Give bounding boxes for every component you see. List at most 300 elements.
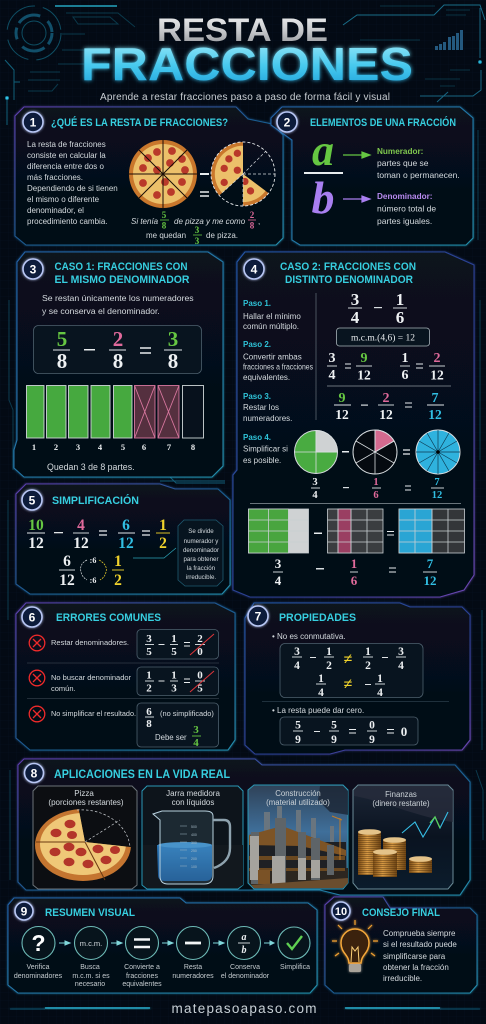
- step icons: [22, 926, 310, 960]
- reduction by 6: 6: [63, 553, 71, 570]
- mcm box: m.c.m.(4,6) = 12: [351, 332, 415, 344]
- equation box: 8: [113, 349, 123, 373]
- error 1: 0: [197, 646, 203, 658]
- panel 7: propiedades: [245, 603, 470, 754]
- property 1: 1: [365, 646, 371, 658]
- error 3: Debe ser: [155, 733, 187, 742]
- subtraction of numerators: 9: [338, 391, 346, 406]
- equation box: 5: [57, 327, 67, 351]
- card finance: (dinero restante): [372, 799, 430, 808]
- equivalent fractions: [327, 351, 451, 386]
- panel 4: caso 2: [233, 252, 474, 597]
- property 2: • La resta puede dar cero.: [272, 706, 364, 715]
- whole pizza cut into eight: [128, 139, 198, 209]
- badge 2: [277, 112, 297, 132]
- error 3: 8: [146, 718, 152, 730]
- definition text: denominador, el: [27, 206, 84, 215]
- card pizza: [33, 786, 137, 889]
- tip text: simplificarse para: [383, 952, 446, 961]
- badge 9: [15, 902, 33, 920]
- example sentence: 8: [162, 220, 167, 230]
- steps text: Paso 3.: [243, 392, 271, 401]
- side circuit lines: [8, 130, 483, 880]
- bar numbers: 4: [98, 442, 103, 452]
- circle fractions: 1: [373, 477, 379, 488]
- heading 10: CONSEJO FINAL: [362, 907, 440, 919]
- reduction by 6: :6: [90, 556, 96, 565]
- panel 5: simplificacion: [16, 484, 230, 594]
- badge 6: 6: [29, 610, 36, 624]
- problem 3/4 - 1/6: [348, 290, 407, 327]
- grid fractions: 7: [427, 556, 434, 571]
- badge 10: 10: [335, 906, 347, 918]
- error 3: No simplificar el resultado.: [51, 709, 136, 718]
- simplification equation: 6: [122, 517, 130, 534]
- simplification equation: 12: [118, 535, 134, 552]
- steps text: Paso 2.: [243, 340, 271, 349]
- heading 9: RESUMEN VISUAL: [45, 907, 135, 919]
- steps text: común múltiplo.: [243, 322, 299, 331]
- example sentence: me quedan: [146, 231, 186, 240]
- note box: para obtener: [183, 556, 219, 563]
- equation box: 2: [113, 327, 123, 351]
- definition text: procedimiento cambia.: [27, 217, 107, 226]
- step arrows: [59, 941, 274, 945]
- error 2: [29, 667, 219, 696]
- step icons: b: [242, 945, 246, 956]
- reduction by 6: 12: [59, 572, 75, 589]
- bar numbers: 3: [76, 442, 80, 452]
- simplification equation: 4: [77, 517, 85, 534]
- property 2: 5: [331, 720, 337, 732]
- card construction: [248, 785, 349, 890]
- steps text: Paso 1.: [243, 299, 271, 308]
- error 2: 1: [171, 670, 177, 682]
- property 1: ≠: [344, 676, 353, 693]
- card pizza: Pizza: [74, 789, 94, 798]
- note box: la fracción: [187, 565, 216, 572]
- note box: numerador y: [184, 538, 219, 545]
- circle 3/4: [294, 430, 338, 474]
- numerador text: Numerador:: [377, 147, 423, 156]
- mcm box: [336, 328, 430, 346]
- denominador text: [377, 192, 436, 226]
- title: RESTA DE: RESTA DE: [157, 12, 328, 48]
- heading 8: APLICACIONES EN LA VIDA REAL: [54, 767, 230, 781]
- heading 3: [54, 261, 190, 286]
- step labels: equivalentes: [122, 981, 162, 988]
- example sentence: 8: [250, 220, 255, 230]
- equivalent fractions: 4: [328, 368, 336, 383]
- subtraction of numerators: 12: [379, 407, 393, 422]
- subtraction of numerators: [334, 391, 444, 422]
- example sentence: 3: [195, 236, 200, 246]
- panel 1 frame: [15, 107, 283, 245]
- equals: [403, 450, 410, 454]
- grid fractions: [273, 556, 437, 588]
- step labels: Simplifica: [280, 964, 310, 971]
- definition text: [27, 140, 118, 226]
- equation box: 8: [57, 349, 67, 373]
- grid fractions: 12: [424, 573, 436, 588]
- heading 3: CASO 1: FRACCIONES CON: [54, 261, 188, 273]
- denominador text: número total de: [377, 204, 436, 214]
- card measuring jug: 500: [191, 825, 197, 829]
- tip text: obtener la fracción: [383, 963, 449, 972]
- card measuring jug: 200: [191, 857, 197, 861]
- error 1: 5: [171, 646, 177, 658]
- equivalent fractions: 12: [430, 368, 444, 382]
- badge 2: 2: [284, 116, 291, 130]
- definition text: consiste en calcular la: [27, 151, 106, 160]
- step labels: Convierte a: [124, 964, 160, 971]
- denominador text: Denominador:: [377, 192, 432, 201]
- circle fractions: 6: [373, 490, 379, 501]
- note box: denominador: [183, 547, 219, 554]
- step icons: ?: [31, 930, 46, 956]
- rule text: [42, 293, 194, 316]
- heading 5: SIMPLIFICACIÓN: [52, 494, 139, 507]
- error 2: 3: [171, 682, 177, 694]
- equals: [387, 532, 394, 535]
- property 1: • No es conmutativa.: [272, 632, 346, 641]
- subtraction of numerators: 12: [335, 407, 349, 422]
- property 1: ≠: [344, 651, 353, 668]
- minus: [314, 532, 322, 534]
- simplification equation: 2: [159, 535, 167, 552]
- arrow to denominator: [343, 196, 370, 202]
- step labels: fracciones: [126, 973, 158, 980]
- equivalent fractions: 2: [434, 351, 440, 366]
- fraction bars: [26, 386, 204, 438]
- step labels: Conserva: [230, 964, 260, 971]
- steps text: fracciones a fracciones: [243, 362, 313, 372]
- steps text: Simplificar si: [243, 444, 288, 454]
- minus sign: [200, 173, 209, 175]
- equation box: 8: [168, 349, 178, 373]
- step labels: el denominador: [221, 973, 270, 980]
- badge 8: [24, 764, 44, 782]
- fraction bar: [304, 172, 343, 174]
- error 2: 1: [146, 670, 152, 682]
- circle fractions: 3: [312, 477, 318, 488]
- definition text: el mismo o diferente: [27, 195, 100, 204]
- panel 3: caso 1: [14, 252, 223, 477]
- arrow to numerator: [343, 152, 370, 158]
- property 2: [272, 706, 418, 746]
- panel 2 frame: [271, 107, 473, 245]
- tip text: [383, 929, 457, 983]
- reduction by 6: 2: [114, 572, 122, 589]
- bar numbers: 1: [32, 442, 36, 452]
- property 1: 2: [365, 660, 371, 672]
- subtraction of numerators: 7: [432, 391, 438, 406]
- badge 7: [248, 606, 268, 626]
- numerador text: toman o permanecen.: [377, 170, 460, 180]
- error 1: 2: [197, 633, 203, 645]
- step labels: Resta: [184, 964, 202, 971]
- footer decoration lines: [10, 1008, 480, 1009]
- reduction by 6: :6: [90, 576, 96, 585]
- note box: irreducible.: [186, 574, 216, 581]
- step labels: Busca: [80, 964, 100, 971]
- circuit decoration: top left dial: [5, 6, 135, 125]
- card measuring jug: 100: [191, 865, 197, 869]
- error 3: 6: [146, 706, 152, 718]
- numerador text: partes que se: [377, 158, 429, 168]
- subtitle: Aprende a restar fracciones paso a paso de forma fácil y visual: [100, 92, 390, 103]
- step labels: m.c.m. si es: [72, 973, 110, 980]
- denominador text: partes iguales.: [377, 216, 432, 226]
- property 1: 3: [294, 646, 300, 658]
- card measuring jug: 400: [191, 833, 197, 837]
- problem 3/4 - 1/6: 3: [351, 290, 359, 309]
- simplification equation: 12: [73, 535, 89, 552]
- property 2: 9: [295, 734, 301, 746]
- heading 1: ¿QUÉ ES LA RESTA DE FRACCIONES?: [51, 116, 228, 129]
- bar numbers: 8: [191, 442, 195, 452]
- panel 10 frame: [325, 897, 477, 993]
- rule text: Se restan únicamente los numeradores: [42, 293, 194, 303]
- panel 9 frame: [8, 898, 317, 993]
- example sentence: Si tenía: [131, 217, 159, 226]
- error 3: 4: [193, 737, 199, 749]
- badge 1: 1: [30, 116, 37, 130]
- steps text: es posible.: [243, 456, 281, 465]
- divider: [315, 293, 317, 420]
- note box: Se divide: [188, 528, 214, 535]
- steps text: Convertir ambas: [243, 352, 302, 362]
- heading 4: [280, 261, 416, 286]
- panel 3 frame: [14, 252, 223, 477]
- property 1: 4: [318, 687, 324, 699]
- grid fractions: 1: [351, 556, 357, 571]
- bar numbers: 2: [54, 442, 58, 452]
- problem 3/4 - 1/6: 1: [396, 290, 404, 309]
- simplification equation: 12: [28, 535, 44, 552]
- error 2: 5: [197, 682, 203, 694]
- definition text: más fracciones.: [27, 173, 83, 182]
- badge 5: 5: [29, 494, 36, 508]
- reduction by 6: 1: [114, 553, 122, 570]
- equation box: [34, 326, 202, 374]
- card measuring jug: [142, 786, 243, 890]
- panel 1: que es la resta: [15, 107, 283, 246]
- card pizza: (porciones restantes): [48, 798, 124, 807]
- rule text: y se conserva el denominador.: [42, 306, 160, 316]
- example sentence: ,: [258, 217, 260, 226]
- property 1: 1: [377, 673, 383, 685]
- circle fractions: 4: [312, 490, 318, 501]
- heading 3: EL MISMO DENOMINADOR: [54, 274, 190, 286]
- bar numbers: [32, 442, 195, 452]
- definition text: diferencia entre dos o: [27, 162, 104, 171]
- property 2: 0: [401, 724, 407, 739]
- panel 6: errores: [16, 603, 235, 750]
- tip text: irreducible.: [383, 974, 422, 983]
- grid 3/4: [248, 509, 308, 553]
- simplification equation: [27, 517, 170, 552]
- bar numbers: 7: [167, 442, 172, 452]
- panel 4 frame: [233, 252, 474, 597]
- error 2: común.: [51, 684, 76, 693]
- error 2: No buscar denominador: [51, 673, 132, 682]
- card finance: Finanzas: [385, 790, 417, 799]
- error 1: 3: [146, 633, 152, 645]
- error 1: [29, 630, 219, 659]
- grid fractions: 3: [275, 556, 282, 571]
- property 1: 3: [398, 646, 404, 658]
- panel 9: resumen visual: [8, 898, 317, 993]
- heading 7: PROPIEDADES: [279, 612, 356, 624]
- badge 4: [244, 259, 264, 279]
- property 1: [272, 632, 423, 699]
- definition text: La resta de fracciones: [27, 140, 106, 149]
- example sentence: 3: [195, 225, 200, 235]
- badge 5: [22, 490, 42, 510]
- error 1: 5: [146, 646, 152, 658]
- steps text: [243, 299, 313, 465]
- title: FRACCIONES: FRACCIONES: [81, 38, 413, 90]
- heading 4: CASO 2: FRACCIONES CON: [280, 261, 416, 273]
- property 2: 5: [295, 720, 301, 732]
- icon: light bulb: [332, 920, 378, 972]
- tip text: si el resultado puede: [383, 940, 457, 949]
- subtraction of numerators: 12: [428, 407, 442, 422]
- caption: Quedan 3 de 8 partes.: [47, 462, 135, 472]
- badge 10: [332, 902, 350, 920]
- card measuring jug: Jarra medidora: [166, 789, 220, 798]
- equivalent fractions: 9: [360, 351, 368, 366]
- problem 3/4 - 1/6: 4: [351, 308, 360, 327]
- heading 4: DISTINTO DENOMINADOR: [285, 274, 413, 286]
- property 2: 9: [369, 734, 375, 746]
- property 2: 9: [331, 734, 337, 746]
- definition text: Dependiendo de si tienen: [27, 184, 118, 193]
- panel 10: consejo final: [325, 897, 477, 993]
- badge 7: 7: [255, 610, 262, 624]
- remaining pizza: [211, 142, 275, 206]
- problem 3/4 - 1/6: 6: [396, 308, 404, 327]
- step labels: [14, 964, 310, 988]
- heading 6: ERRORES COMUNES: [56, 612, 161, 624]
- grid fractions: 6: [351, 573, 358, 588]
- steps text: Restar los: [243, 403, 279, 412]
- circuit decoration: top right chart: [343, 5, 485, 102]
- steps text: Paso 4.: [243, 433, 271, 442]
- step labels: numeradores: [172, 973, 214, 980]
- panel 8: aplicaciones: [18, 759, 470, 895]
- property 1: 2: [326, 660, 332, 672]
- example sentence: [131, 210, 260, 246]
- steps text: numeradores.: [243, 414, 292, 423]
- badge 4: 4: [251, 262, 258, 276]
- simplification equation: 10: [28, 517, 44, 534]
- property 1: 4: [398, 660, 404, 672]
- card finance: [353, 785, 453, 889]
- property 1: 4: [294, 660, 300, 672]
- property 1: 1: [318, 673, 324, 685]
- error 1: Restar denominadores.: [51, 638, 129, 647]
- example sentence: de pizza y me como: [174, 217, 246, 226]
- example sentence: 2: [250, 210, 255, 220]
- card measuring jug: con líquidos: [172, 798, 214, 807]
- equation box: 3: [168, 327, 178, 351]
- minus: [342, 451, 349, 452]
- step labels: denominadores: [14, 973, 63, 980]
- subtraction of numerators: 2: [382, 391, 390, 406]
- panel 6 frame: [16, 603, 235, 750]
- badge 3: [23, 259, 43, 279]
- bar numbers: 5: [121, 442, 125, 452]
- panel 2: elementos: [271, 107, 473, 245]
- letter a numerator: a: [312, 126, 334, 175]
- letter b denominator: b: [312, 172, 334, 223]
- reduction by 6: [59, 553, 124, 589]
- steps text: Hallar el mínimo: [243, 312, 301, 321]
- equals sign: [200, 192, 209, 196]
- equivalent fractions: 12: [357, 368, 371, 382]
- badge 3: 3: [30, 262, 37, 276]
- property 1: 4: [377, 687, 383, 699]
- tip text: Comprueba siempre: [383, 929, 456, 938]
- connector: [133, 548, 176, 558]
- bar numbers: 6: [142, 442, 146, 452]
- footer website: matepasoapaso.com: [172, 1001, 316, 1016]
- step labels: Verifica: [27, 964, 50, 971]
- equivalent fractions: 1: [402, 351, 408, 366]
- step labels: necesario: [75, 981, 105, 988]
- simplification equation: 1: [159, 517, 167, 534]
- card construction: Construcción: [275, 789, 321, 798]
- panel 5 frame: [16, 484, 230, 594]
- grid 1/6: [328, 509, 383, 553]
- note box: [178, 520, 223, 586]
- numerador text: [377, 147, 460, 180]
- badge 8: 8: [31, 766, 38, 780]
- card measuring jug: 300: [191, 841, 197, 845]
- panel 8 frame: [18, 759, 470, 895]
- error 3: [29, 703, 219, 749]
- steps text: equivalentes.: [243, 373, 290, 382]
- card construction: (material utilizado): [266, 798, 330, 807]
- property 1: 1: [326, 646, 332, 658]
- badge 6: [22, 607, 42, 627]
- circle 1/6: [353, 430, 397, 474]
- example sentence: de pizza.: [206, 231, 238, 240]
- panel 7 frame: [245, 603, 470, 754]
- circle fractions: 12: [432, 490, 442, 501]
- error 1: 1: [171, 633, 177, 645]
- grid 7/12: [399, 509, 464, 553]
- heading 2: ELEMENTOS DE UNA FRACCIÓN: [310, 116, 456, 129]
- circle fractions: [250, 477, 461, 504]
- error 2: 2: [146, 682, 152, 694]
- error 3: (no simplificado): [160, 709, 214, 718]
- equivalent fractions: 6: [402, 368, 408, 383]
- circle fractions: 7: [434, 477, 440, 488]
- equivalent fractions: 3: [328, 351, 336, 366]
- badge 1: [23, 112, 43, 132]
- circle 7/12: [416, 430, 460, 474]
- card measuring jug: 250: [191, 849, 197, 853]
- badge 9: 9: [21, 904, 28, 918]
- error 2: 0: [197, 670, 203, 682]
- grid fractions: 4: [275, 573, 282, 588]
- example sentence: 5: [162, 210, 167, 220]
- property 2: 0: [369, 720, 375, 732]
- error 3: 3: [193, 724, 199, 736]
